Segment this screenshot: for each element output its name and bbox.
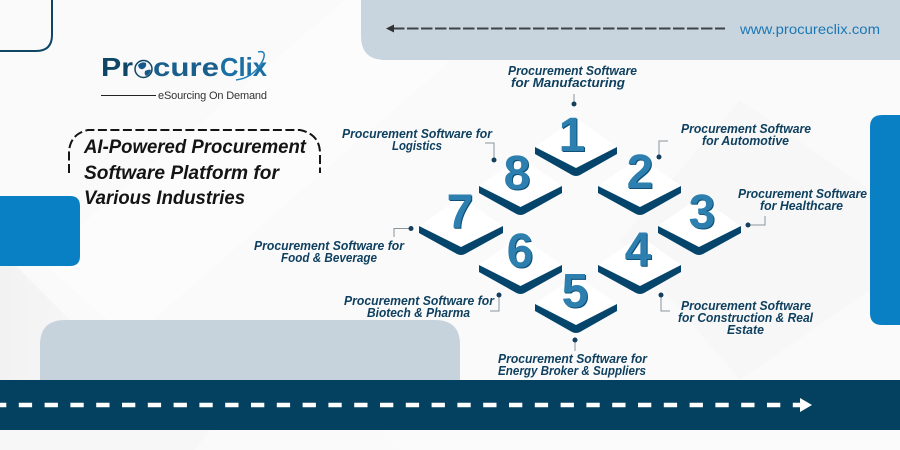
logo wordmark: cure	[153, 52, 219, 82]
step 2	[598, 146, 681, 215]
label 5: energy broker and suppliers: Energy Broker & Suppliers	[498, 364, 646, 378]
step 2: 2	[627, 146, 653, 199]
logo	[101, 52, 268, 102]
title: Various Industries	[84, 188, 245, 209]
top left outlined box	[0, 0, 52, 51]
step 6	[479, 225, 562, 294]
step 8	[479, 147, 562, 215]
top right panel	[361, 0, 900, 60]
logo wordmark: Pr	[101, 52, 133, 82]
step 4	[598, 224, 681, 294]
label 8: logistics: Logistics	[392, 139, 442, 153]
logo wordmark: o	[135, 52, 152, 82]
label 6: biotech and pharma	[344, 292, 502, 320]
step 5: 5	[562, 265, 588, 318]
step 1: 1	[559, 109, 585, 162]
label 1: manufacturing: for Manufacturing	[511, 76, 625, 90]
right blue tab	[870, 115, 900, 325]
label 5: energy broker and suppliers: Procurement Software for	[498, 352, 648, 366]
step 3	[658, 186, 741, 255]
label 5: energy broker and suppliers	[498, 338, 648, 378]
step 7	[419, 186, 503, 255]
step 4: 4	[625, 224, 652, 277]
label 8: logistics: Procurement Software for	[342, 127, 493, 141]
dashed arrow: bottom band	[0, 398, 812, 412]
dashed arrow: top panel	[386, 24, 725, 32]
logo swoosh	[236, 52, 264, 80]
logo globe	[135, 60, 152, 78]
step 3: 3	[689, 186, 715, 239]
title: Software Platform for	[84, 163, 281, 184]
label 7: food and beverage	[254, 226, 414, 265]
label 4: construction and real estate: for Construction & Real	[678, 311, 813, 325]
label 3: healthcare: for Healthcare	[760, 199, 843, 213]
step 1	[535, 109, 617, 176]
website url: www.procureclix.com	[739, 21, 880, 37]
title: AI-Powered Procurement	[83, 137, 307, 158]
label 2: automotive	[656, 122, 811, 160]
label 3: healthcare: Procurement Software	[738, 187, 867, 201]
step 6: 6	[507, 225, 533, 278]
bottom band	[0, 380, 900, 430]
label 2: automotive: Procurement Software	[681, 122, 811, 136]
logo tagline: eSourcing On Demand	[158, 90, 267, 102]
label 4: construction and real estate: Procurement Software	[681, 299, 811, 313]
label 7: food and beverage: Procurement Software for	[254, 239, 405, 253]
bottom gray panel	[40, 320, 460, 380]
title	[83, 137, 307, 209]
label 8: logistics	[342, 127, 496, 162]
label 4: construction and real estate: Estate	[727, 323, 764, 337]
left blue tab	[0, 196, 80, 266]
logo wordmark: Clix	[220, 52, 268, 82]
label 1: manufacturing	[508, 64, 637, 106]
logo wordmark	[101, 52, 268, 82]
label 6: biotech and pharma: Procurement Software for	[344, 294, 495, 308]
step 8: 8	[504, 147, 530, 200]
step 7: 7	[447, 186, 473, 239]
label 6: biotech and pharma: Biotech & Pharma	[367, 306, 470, 320]
label 3: healthcare	[738, 187, 867, 228]
label 7: food and beverage: Food & Beverage	[281, 251, 377, 265]
logo tagline rule	[101, 94, 156, 96]
label 4: construction and real estate	[658, 292, 813, 337]
label 2: automotive: for Automotive	[702, 134, 789, 148]
step 5	[535, 265, 617, 333]
title frame	[69, 130, 320, 173]
label 1: manufacturing: Procurement Software	[508, 64, 637, 78]
